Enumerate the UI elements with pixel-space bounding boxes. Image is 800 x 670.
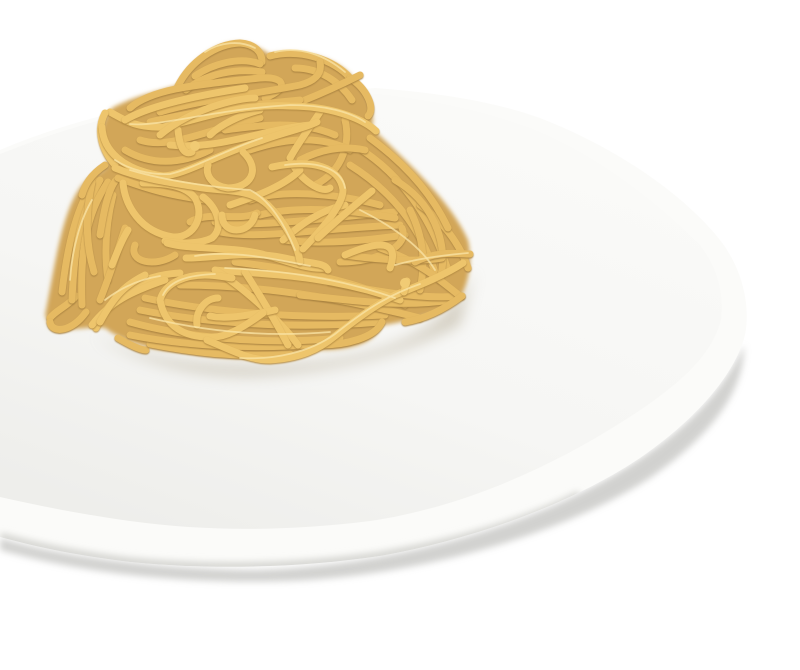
shadow under pasta xyxy=(95,270,474,376)
strand highlights xyxy=(70,43,468,358)
pasta nest xyxy=(45,42,470,360)
strand ends xyxy=(400,278,410,288)
bundle strands, back layer xyxy=(50,43,470,355)
middle strands xyxy=(92,110,400,345)
illustration: spaghetti on plate xyxy=(0,38,746,585)
plate xyxy=(0,88,747,567)
pasta mass xyxy=(45,42,470,358)
plate rim xyxy=(0,88,747,567)
plate well xyxy=(0,94,722,529)
rim lower shading xyxy=(0,495,580,567)
plate shadow on table xyxy=(0,345,744,582)
front strands xyxy=(101,88,463,360)
